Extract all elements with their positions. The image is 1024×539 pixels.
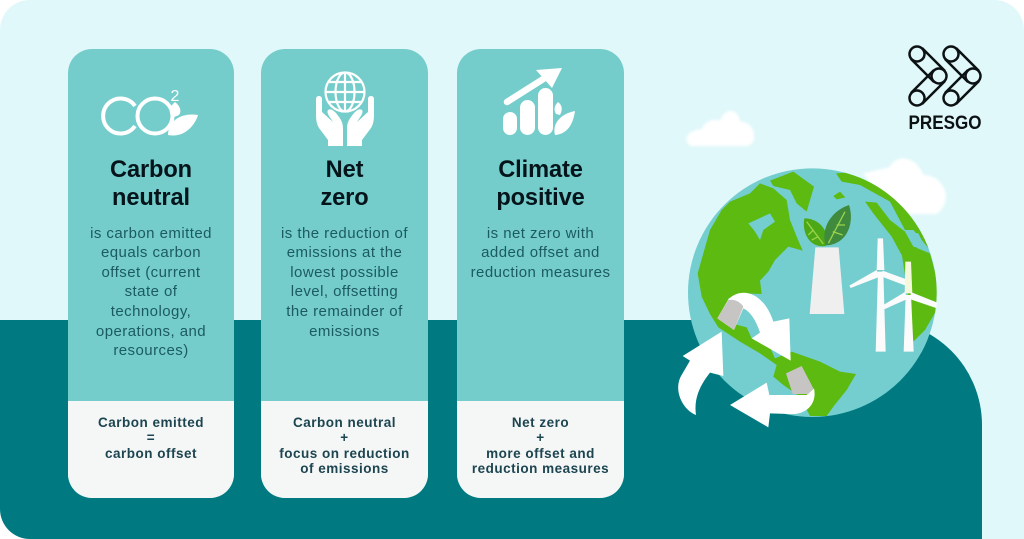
- formula: +: [536, 430, 545, 445]
- description: offset (current: [101, 264, 200, 281]
- icon: recycling arrows: [678, 293, 815, 427]
- globe: [688, 168, 940, 417]
- illustration: globe, clouds, recycling arrows: [678, 110, 946, 428]
- heading: [496, 157, 585, 211]
- formula: [472, 414, 609, 476]
- lower panel: [457, 401, 624, 498]
- description: level, offsetting: [291, 283, 398, 300]
- heading: zero: [320, 185, 369, 211]
- description: operations, and: [96, 323, 206, 340]
- formula: reduction measures: [472, 461, 609, 476]
- formula: of emissions: [300, 461, 389, 476]
- heading: Carbon: [110, 157, 192, 183]
- lower panel: [68, 401, 234, 498]
- logo: PRESGO: [908, 45, 982, 134]
- Greenland: [770, 172, 814, 212]
- cloud right: [863, 159, 946, 214]
- description: [281, 224, 408, 340]
- icon: CO2 with leaves: 2: [171, 88, 180, 105]
- description: added offset and: [481, 244, 600, 261]
- formula: carbon offset: [105, 446, 197, 461]
- description: [90, 224, 212, 359]
- description: technology,: [111, 303, 191, 320]
- formula: [279, 414, 410, 476]
- formula: Net zero: [512, 414, 569, 430]
- heading: [320, 157, 369, 211]
- description: emissions: [309, 323, 380, 340]
- icon: hands holding globe: [316, 71, 374, 146]
- panel: carbon neutral: [68, 49, 234, 498]
- heading: neutral: [112, 185, 190, 211]
- icon: CO2 with leaves: [101, 88, 198, 136]
- description: reduction measures: [471, 264, 610, 281]
- formula: Carbon neutral: [293, 414, 396, 430]
- panel: net zero: [261, 49, 428, 498]
- heading: Net: [326, 157, 363, 183]
- heading: positive: [496, 185, 585, 211]
- description: state of: [125, 283, 177, 300]
- cloud left: [687, 111, 754, 146]
- formula: +: [340, 430, 349, 445]
- logo: PRESGO: PRESGO: [908, 113, 982, 134]
- lower panel: [261, 401, 428, 498]
- formula: focus on reduction: [279, 446, 410, 461]
- panel: climate positive: [457, 49, 624, 498]
- description: emissions at the: [287, 244, 402, 261]
- icon: leaves on chimney: [804, 205, 851, 314]
- description: lowest possible: [290, 264, 399, 281]
- formula: Carbon emitted: [98, 414, 204, 430]
- heading: [110, 157, 192, 211]
- description: the remainder of: [286, 303, 403, 320]
- Americas: [698, 183, 856, 416]
- icon: wind turbines: [849, 238, 937, 352]
- description: resources): [113, 342, 189, 359]
- description: equals carbon: [101, 244, 201, 261]
- Eurasia edge: [836, 172, 930, 250]
- heading: Climate: [498, 157, 583, 183]
- formula: more offset and: [486, 446, 595, 461]
- description: [471, 224, 610, 281]
- description: is carbon emitted: [90, 224, 212, 242]
- formula: =: [147, 430, 155, 445]
- formula: [98, 414, 204, 461]
- description: is net zero with: [487, 224, 594, 242]
- icon: rising bars with arrow and leaf: [503, 68, 575, 135]
- description: is the reduction of: [281, 224, 408, 242]
